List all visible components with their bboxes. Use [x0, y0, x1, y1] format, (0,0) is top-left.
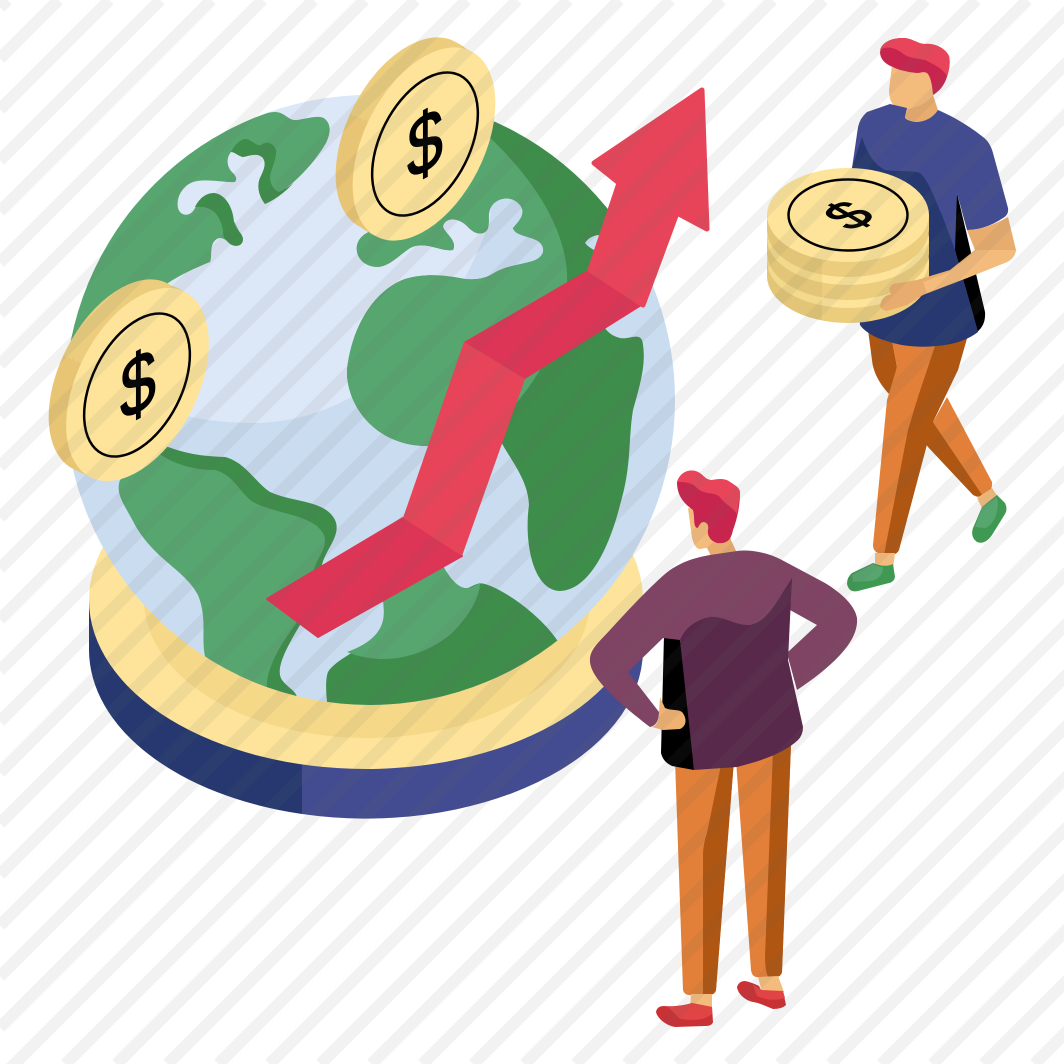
middle coin: [767, 238, 929, 300]
front shoe highlight: [852, 564, 883, 582]
ocean highlight: [168, 96, 491, 423]
base top: [89, 431, 643, 769]
front leg: [873, 340, 940, 555]
front shoe: [847, 563, 895, 591]
base side light: [302, 600, 643, 819]
left ankle: [690, 994, 712, 1010]
rear ankle: [977, 488, 998, 508]
top coin: [767, 215, 929, 277]
base side dark: [89, 600, 302, 814]
front ankle: [875, 553, 895, 568]
land: eurasia and africa: [347, 121, 644, 591]
man carrying coins: [767, 38, 1016, 591]
front leg shade: [884, 335, 968, 555]
small lake: [585, 235, 599, 250]
face: [688, 508, 732, 549]
land: north america: [70, 112, 330, 342]
arrow head: [590, 90, 707, 305]
hair: [677, 470, 740, 543]
arms and shoulders: [590, 550, 857, 727]
arm: [880, 217, 1016, 311]
right ankle: [758, 976, 784, 992]
left leg: [675, 760, 734, 995]
coin top dollar: $: [407, 86, 443, 199]
right shoe highlight: [753, 985, 785, 1000]
arrow segment 3: [464, 270, 643, 379]
red growth arrow: [267, 90, 707, 637]
black shirt gap: [950, 193, 985, 332]
land: south dark: [326, 568, 558, 705]
hair highlight: [880, 38, 950, 76]
land: south light: [347, 560, 480, 659]
land: north america shade lower: [195, 193, 243, 246]
coin top side: [306, 14, 521, 262]
coin top ring: [350, 55, 500, 233]
right leg: [736, 745, 791, 977]
coin stack: [767, 168, 929, 323]
coin top face: [323, 24, 525, 264]
left shoe highlight: [668, 1003, 712, 1020]
right leg shade: [765, 745, 791, 977]
rear shoe highlight: [975, 497, 998, 528]
land: north america shade upper: [231, 139, 294, 204]
pedestal base: [89, 431, 643, 819]
coin left ring: [62, 296, 212, 474]
back leg shade: [890, 395, 983, 497]
right shoe: [737, 981, 786, 1009]
arm gap right: [788, 610, 817, 652]
neck: [707, 538, 737, 560]
land: south america dark: [150, 440, 337, 700]
land highlight: [347, 138, 568, 446]
hand: [652, 697, 686, 730]
hip shade: [868, 330, 897, 395]
coin left side: [19, 256, 234, 502]
arrow segment 1: [267, 518, 462, 637]
black shirt gap: [661, 623, 694, 770]
hair: [880, 38, 950, 95]
globe: [70, 95, 675, 705]
back leg: [933, 397, 992, 496]
forearm highlight: [923, 250, 1016, 293]
bottom coin: [767, 261, 929, 323]
base inner ring: [144, 462, 590, 738]
land: south america light: [118, 454, 325, 687]
hair highlight: [677, 470, 740, 514]
ocean: [60, 90, 680, 710]
top coin ring: [788, 180, 908, 250]
torso dark: [680, 578, 803, 770]
left leg shade: [703, 760, 734, 995]
coin left: [19, 256, 238, 504]
coin top: [306, 14, 525, 264]
middle coin top: [767, 191, 929, 285]
face: [889, 65, 935, 112]
left shoe: [656, 1003, 713, 1027]
shirt: [852, 104, 1008, 332]
man standing: [590, 470, 857, 1027]
bottom coin top: [767, 214, 929, 308]
coin left face: [37, 265, 238, 504]
coin left dollar: $: [120, 327, 156, 440]
top coin face: [767, 168, 929, 262]
shirt shade: [852, 137, 978, 347]
arrow segment 2: [403, 342, 525, 556]
rear shoe: [972, 495, 1006, 543]
neck: [905, 95, 938, 122]
top coin dollar: $: [810, 193, 888, 238]
